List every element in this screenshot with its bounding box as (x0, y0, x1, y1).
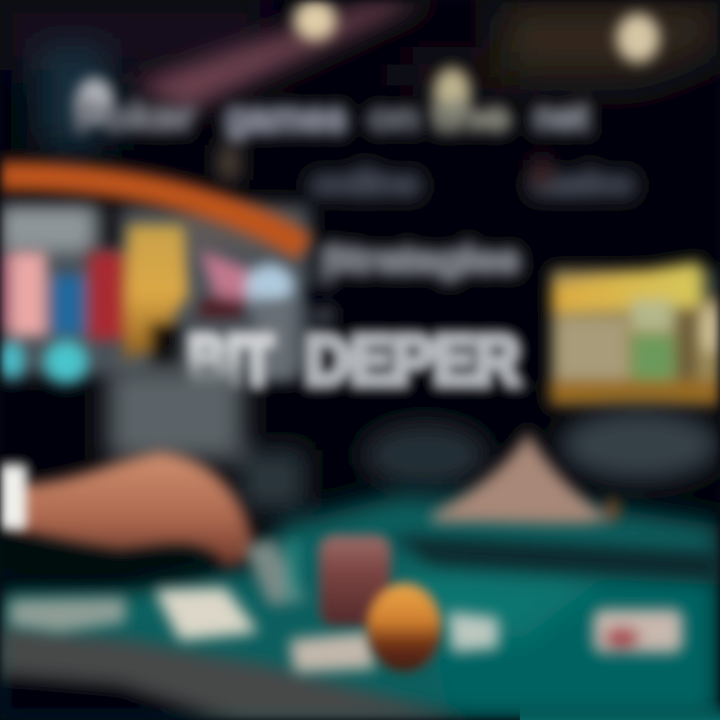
heading on dark panel (255, 239, 520, 380)
subheadings: casino (530, 162, 635, 203)
bottom rail (0, 625, 470, 720)
ceiling (0, 0, 720, 150)
large text (188, 321, 520, 399)
dark table edge (390, 535, 720, 582)
headline: Poker (75, 95, 195, 139)
large text: DEPER (305, 321, 520, 399)
orange arc (0, 176, 305, 248)
headline: on (368, 97, 420, 139)
dark seating (363, 409, 720, 487)
cards (10, 588, 682, 672)
small warm glows (218, 145, 552, 184)
green table (0, 495, 720, 720)
subheadings: online (310, 162, 420, 203)
large text: BIT (188, 321, 273, 399)
headline: net (533, 95, 589, 139)
subheadings (310, 162, 635, 203)
white cuff (0, 465, 26, 529)
headline (75, 93, 589, 142)
headline: the (432, 95, 510, 139)
orange ball (367, 584, 441, 672)
maroon ceiling beam (130, 0, 425, 112)
pink triangle (432, 432, 618, 523)
heading on dark panel: Strategies (320, 239, 520, 281)
dark band under hand (0, 535, 240, 575)
ceiling lights (77, 0, 659, 122)
right screen (550, 262, 720, 405)
chip stack (320, 536, 390, 626)
grey panel behind hand (108, 368, 305, 510)
finger and chip edge (245, 538, 305, 605)
hand (14, 452, 256, 568)
table edge fill (520, 700, 720, 720)
headline: games (225, 93, 347, 142)
left screen (0, 205, 310, 383)
